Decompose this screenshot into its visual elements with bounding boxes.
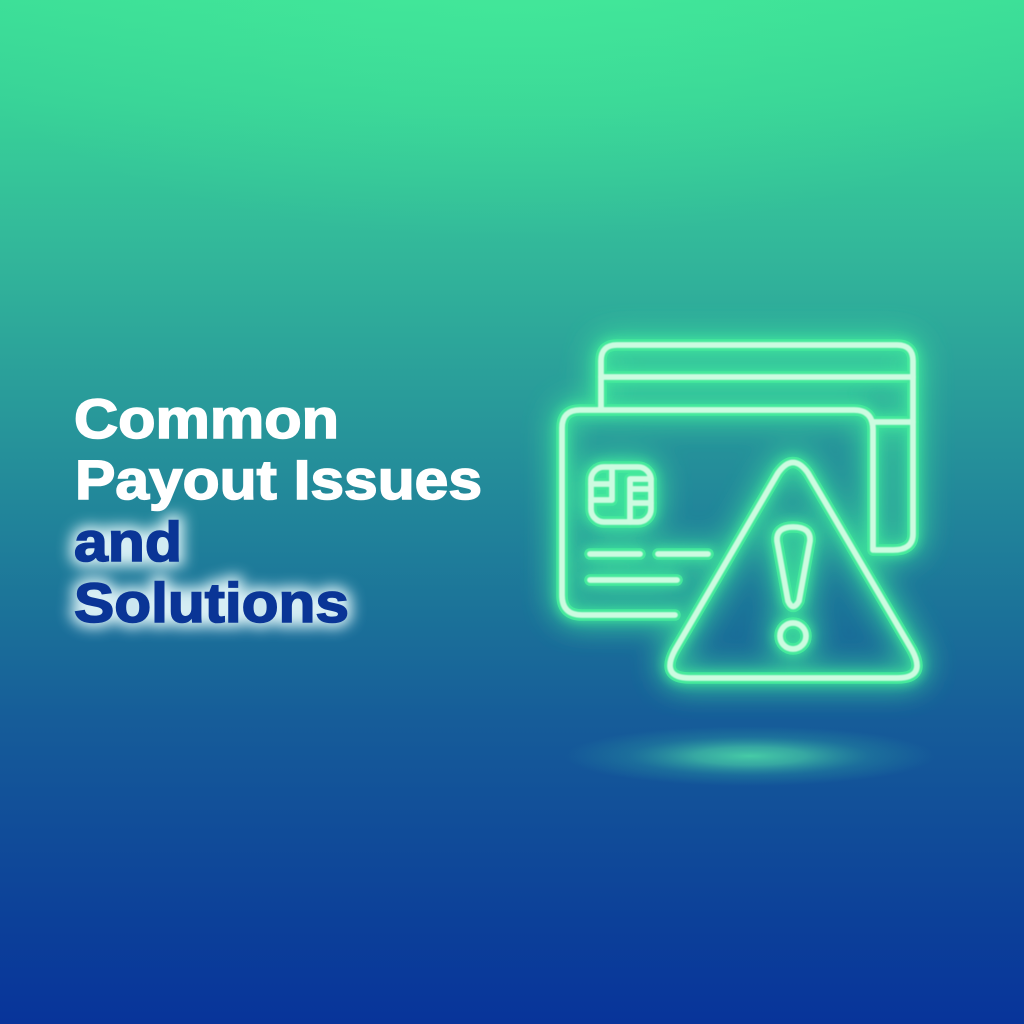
top light bloom xyxy=(0,0,1024,300)
highlighted title words with glow: and xyxy=(74,510,182,573)
floor glow beneath icon xyxy=(565,726,935,786)
highlighted title words with glow: Solutions xyxy=(74,571,349,634)
title line: Payout Issues: Payout Issues xyxy=(75,448,482,511)
highlighted title words with glow xyxy=(74,510,349,634)
title line: and: and xyxy=(74,510,182,573)
title line: Solutions: Solutions xyxy=(74,571,349,634)
title line: Common: Common xyxy=(74,387,339,450)
title xyxy=(74,387,482,634)
icon: neon credit cards with warning triangle xyxy=(562,345,917,678)
